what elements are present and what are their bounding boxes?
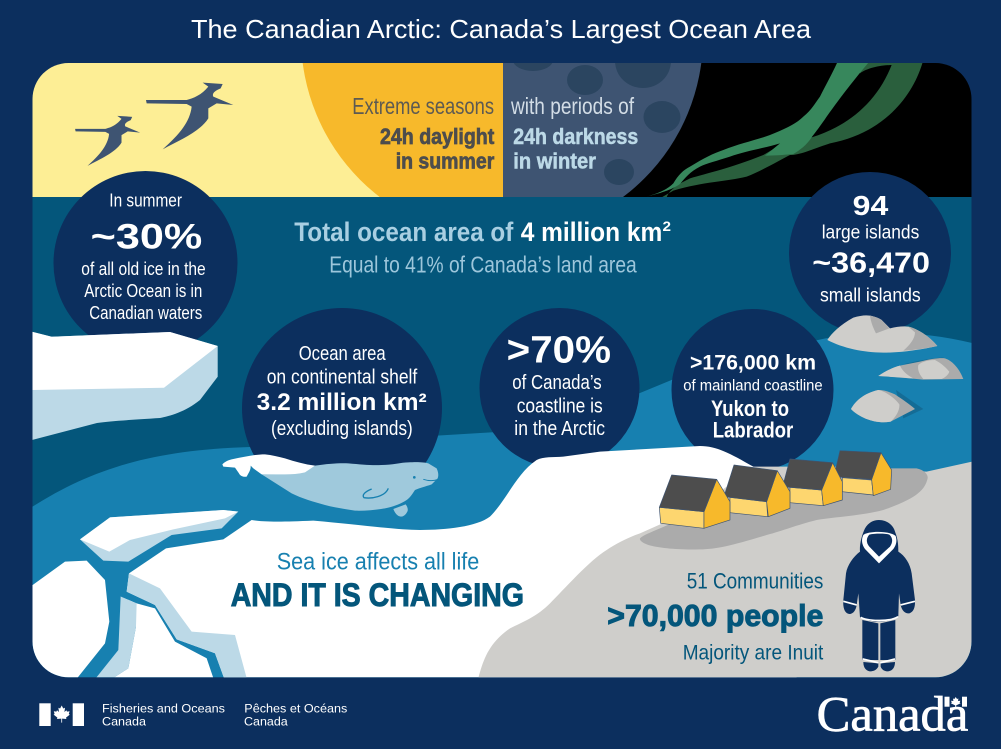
text: periods of darkness, winter: with periods of <box>510 93 634 119</box>
text: communities <box>607 568 823 664</box>
circle: islands background <box>789 172 951 334</box>
text: extreme seasons, summer: Extreme seasons <box>352 93 494 119</box>
text: sea ice message: Sea ice affects all life <box>277 548 479 575</box>
text: old ice statistic: In summer <box>109 190 182 211</box>
text: continental shelf statistic: on continental shelf <box>267 366 418 388</box>
circle: old ice background <box>54 171 238 355</box>
panel: winter night sky <box>623 63 972 197</box>
text: continental shelf statistic: (excluding islands) <box>271 418 413 440</box>
text: islands statistic: large islands <box>822 222 920 244</box>
title: The Canadian Arctic: Canada’s Largest Ocean Area <box>191 14 812 44</box>
text: extreme seasons, summer <box>352 93 495 174</box>
text: extreme seasons, summer: in summer <box>396 149 495 174</box>
text: total ocean area: Equal to 41% of Canada’s land area <box>329 252 637 278</box>
text: department name <box>102 702 347 729</box>
panel: summer sky <box>32 63 380 197</box>
icon: small bird <box>75 116 140 166</box>
circle: mainland coastline background <box>672 309 834 471</box>
icon: houses <box>659 451 892 528</box>
text: periods of darkness, winter: 24h darkness <box>513 124 638 149</box>
text: old ice statistic <box>81 190 206 323</box>
text: mainland coastline statistic: of mainland coastline <box>683 377 823 394</box>
text: mainland coastline statistic: >176,000 km <box>690 350 816 374</box>
text: continental shelf statistic: 3.2 million km² <box>257 389 427 416</box>
text: total ocean area: 4 million km <box>521 217 662 247</box>
text: department name: Fisheries and Oceans <box>102 702 225 716</box>
text: sea ice message <box>231 548 524 613</box>
panel: land <box>478 457 993 678</box>
panel: deep ocean <box>32 197 972 678</box>
text: total ocean area: Total ocean area of <box>294 217 514 247</box>
text: communities: >70,000 people <box>607 598 823 633</box>
icon: ground shadow <box>640 468 928 549</box>
text: coastline share statistic: in the Arctic <box>514 418 605 440</box>
text: old ice statistic: Canadian waters <box>89 302 202 323</box>
text: old ice statistic: ~30% <box>91 217 202 256</box>
circle: coastline share background <box>480 308 640 468</box>
text: communities: 51 Communities <box>687 568 823 593</box>
text: continental shelf statistic: Ocean area <box>299 343 386 365</box>
text: periods of darkness, winter <box>510 93 638 174</box>
text: total ocean area: 2 <box>662 218 671 234</box>
text: department name: Canada <box>102 715 146 729</box>
icon: Government of Canada flag symbol <box>39 703 84 726</box>
text: coastline share statistic: coastline is <box>517 395 603 417</box>
text: coastline share statistic: >70% <box>507 330 611 372</box>
logo: Canada wordmark: Canada <box>817 686 968 742</box>
panel: shallow water <box>32 333 972 678</box>
icon: sea ice floes and cracks <box>30 446 797 678</box>
text: islands statistic <box>812 190 930 307</box>
text: old ice statistic: Arctic Ocean is in <box>84 280 202 301</box>
circle: continental shelf background <box>242 308 442 466</box>
icon: aurora borealis <box>643 60 923 197</box>
text: coastline share statistic: of Canada’s <box>512 372 602 394</box>
text: department name: Canada <box>244 715 288 729</box>
icon: islands <box>827 315 963 422</box>
text: islands statistic: ~36,470 <box>812 248 930 280</box>
text: extreme seasons, summer: 24h daylight <box>380 124 495 149</box>
icon: moon with craters <box>503 63 702 197</box>
text: mainland coastline statistic: Yukon to <box>711 396 789 421</box>
text: old ice statistic: of all old ice in the <box>81 258 206 279</box>
text: total ocean area <box>294 217 671 278</box>
text: continental shelf statistic <box>257 343 427 440</box>
text: communities: Majority are Inuit <box>683 641 823 664</box>
text: periods of darkness, winter: in winter <box>513 149 596 174</box>
text: sea ice message: AND IT IS CHANGING <box>231 577 524 613</box>
icon: sun <box>302 63 503 197</box>
text: islands statistic: small islands <box>820 285 921 307</box>
icon: beluga whale <box>222 454 438 517</box>
icon: ice shelf <box>32 332 218 440</box>
text: mainland coastline statistic <box>683 350 823 442</box>
text: mainland coastline statistic: Labrador <box>713 417 794 442</box>
text: coastline share statistic <box>507 330 611 440</box>
icon: large bird <box>146 83 233 149</box>
text: department name: Pêches et Océans <box>244 702 347 716</box>
text: islands statistic: 94 <box>853 190 889 221</box>
icon: person in parka <box>843 520 915 671</box>
panel: main illustration <box>32 63 972 678</box>
